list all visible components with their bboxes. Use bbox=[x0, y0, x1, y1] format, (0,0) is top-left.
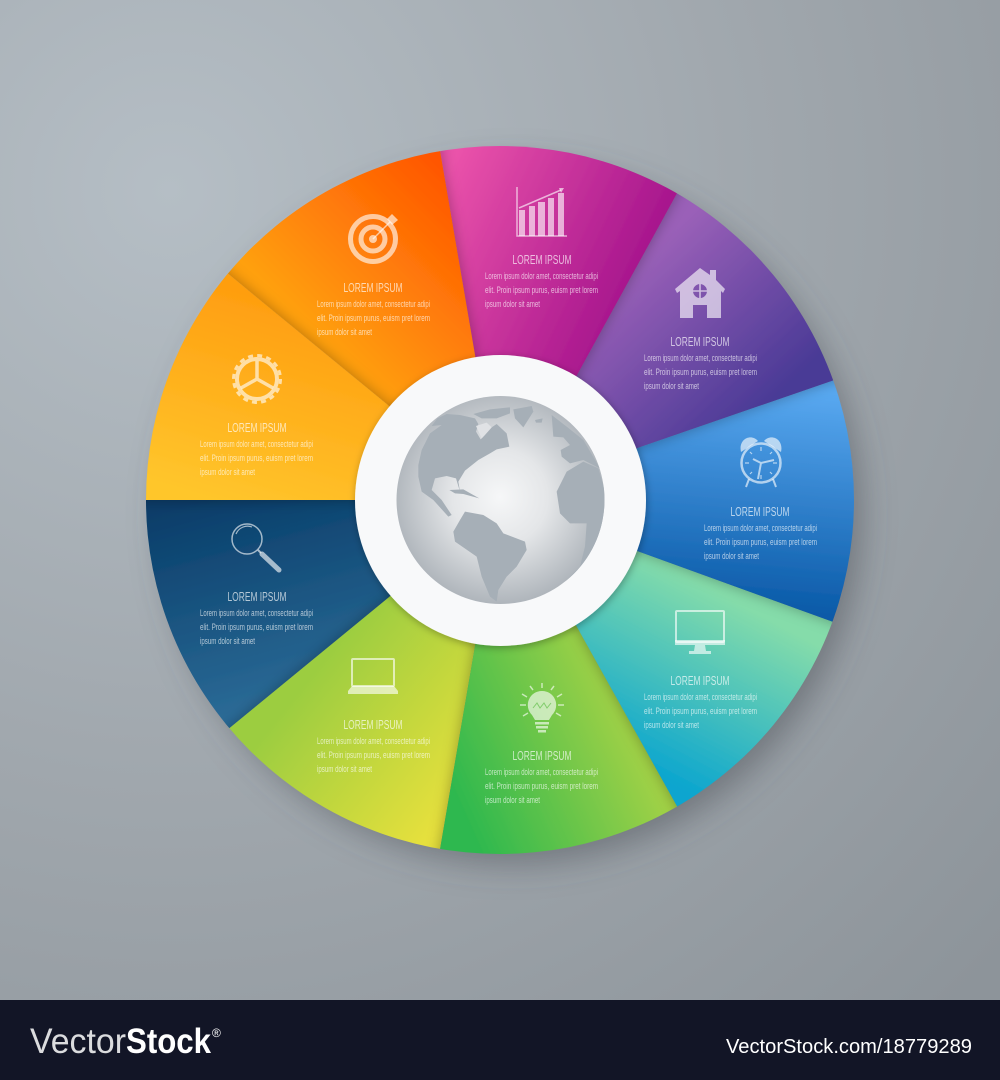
text block: Lorem ipsum dolor amet, consectetur adipi bbox=[317, 299, 430, 309]
panel: purple text bbox=[644, 268, 757, 391]
wedge: navy bbox=[146, 500, 390, 728]
icon: gear bbox=[234, 356, 280, 402]
heading: LOREM IPSUM bbox=[670, 673, 730, 688]
text block: Lorem ipsum dolor amet, consectetur adipi bbox=[317, 736, 430, 746]
text block bbox=[485, 767, 598, 805]
text block bbox=[317, 299, 430, 337]
text block: ipsum dolor sit amet bbox=[200, 467, 255, 477]
center ring bbox=[355, 355, 646, 646]
wedge: green bbox=[432, 625, 677, 854]
panel: teal text bbox=[644, 611, 757, 730]
text block: Lorem ipsum dolor amet, consectetur adipi bbox=[704, 523, 817, 533]
text block: ipsum dolor sit amet bbox=[644, 720, 699, 730]
heading: LOREM IPSUM bbox=[344, 280, 402, 295]
icon: alarm clock bbox=[741, 437, 781, 487]
text block: ipsum dolor sit amet bbox=[200, 636, 255, 646]
icon: laptop bbox=[348, 659, 398, 694]
icon: magnifying glass bbox=[232, 524, 279, 570]
text block: ipsum dolor sit amet bbox=[704, 551, 759, 561]
heading: LOREM IPSUM bbox=[228, 420, 286, 435]
text block: Lorem ipsum dolor amet, consectetur adipi bbox=[200, 439, 313, 449]
heading: LOREM IPSUM bbox=[228, 589, 286, 604]
panel: lime text bbox=[317, 659, 430, 774]
text block: elit. Proin ipsum purus, euism pret lorem bbox=[704, 537, 817, 547]
text block bbox=[644, 692, 757, 730]
panel: yellow text bbox=[200, 356, 313, 477]
icon: bar chart bbox=[517, 187, 567, 236]
footer logo: Stock bbox=[126, 1022, 211, 1061]
wedge: teal bbox=[570, 551, 832, 810]
text block: Lorem ipsum dolor amet, consectetur adipi bbox=[644, 692, 757, 702]
pie wedges bbox=[146, 146, 854, 854]
footer logo: Vector bbox=[30, 1022, 126, 1061]
text block: ipsum dolor sit amet bbox=[644, 381, 699, 391]
heading: LOREM IPSUM bbox=[670, 334, 730, 349]
footer logo: ® bbox=[212, 1026, 221, 1040]
icon: target bbox=[350, 214, 398, 262]
panel: orange text bbox=[317, 214, 430, 337]
wedge: orange bbox=[228, 150, 482, 406]
text block: Lorem ipsum dolor amet, consectetur adipi bbox=[644, 353, 757, 363]
text block: ipsum dolor sit amet bbox=[317, 327, 372, 337]
text block: elit. Proin ipsum purus, euism pret lorem bbox=[485, 285, 598, 295]
text block bbox=[485, 271, 598, 309]
heading: LOREM IPSUM bbox=[344, 717, 402, 732]
pie drop shadow bbox=[162, 164, 862, 864]
text block bbox=[200, 608, 313, 646]
text block: elit. Proin ipsum purus, euism pret lorem bbox=[317, 313, 430, 323]
heading: LOREM IPSUM bbox=[512, 252, 572, 267]
text block: elit. Proin ipsum purus, euism pret lorem bbox=[200, 453, 313, 463]
text block: ipsum dolor sit amet bbox=[485, 299, 540, 309]
icon: house bbox=[675, 268, 725, 318]
text block bbox=[317, 736, 430, 774]
icon: light bulb bbox=[520, 683, 564, 732]
footer image id: VectorStock.com/18779289 bbox=[726, 1036, 972, 1058]
wedge: yellow bbox=[146, 268, 394, 505]
panel: blue text bbox=[704, 437, 817, 561]
text block bbox=[704, 523, 817, 561]
wedge: purple bbox=[576, 194, 836, 455]
text block: ipsum dolor sit amet bbox=[485, 795, 540, 805]
panel: green text bbox=[485, 683, 598, 805]
text block: Lorem ipsum dolor amet, consectetur adipi bbox=[485, 767, 598, 777]
text block: elit. Proin ipsum purus, euism pret lorem bbox=[644, 367, 757, 377]
text block bbox=[200, 439, 313, 477]
heading: LOREM IPSUM bbox=[730, 504, 790, 519]
footer band bbox=[0, 1000, 1000, 1080]
text block: Lorem ipsum dolor amet, consectetur adipi bbox=[485, 271, 598, 281]
wedge: pink bbox=[440, 146, 683, 379]
continents bbox=[418, 406, 607, 602]
icon: monitor bbox=[675, 611, 725, 654]
text block: ipsum dolor sit amet bbox=[317, 764, 372, 774]
globe bbox=[396, 396, 607, 604]
text block: elit. Proin ipsum purus, euism pret lorem bbox=[317, 750, 430, 760]
panel: navy text bbox=[200, 524, 313, 646]
text block: Lorem ipsum dolor amet, consectetur adipi bbox=[200, 608, 313, 618]
heading: LOREM IPSUM bbox=[512, 748, 572, 763]
text block: elit. Proin ipsum purus, euism pret lorem bbox=[644, 706, 757, 716]
wedge: lime bbox=[226, 592, 476, 849]
panel: pink text bbox=[485, 187, 598, 309]
text block bbox=[644, 353, 757, 391]
text block: elit. Proin ipsum purus, euism pret lorem bbox=[200, 622, 313, 632]
text block: elit. Proin ipsum purus, euism pret lorem bbox=[485, 781, 598, 791]
footer logo bbox=[30, 1022, 221, 1061]
wedge: blue bbox=[635, 380, 854, 629]
